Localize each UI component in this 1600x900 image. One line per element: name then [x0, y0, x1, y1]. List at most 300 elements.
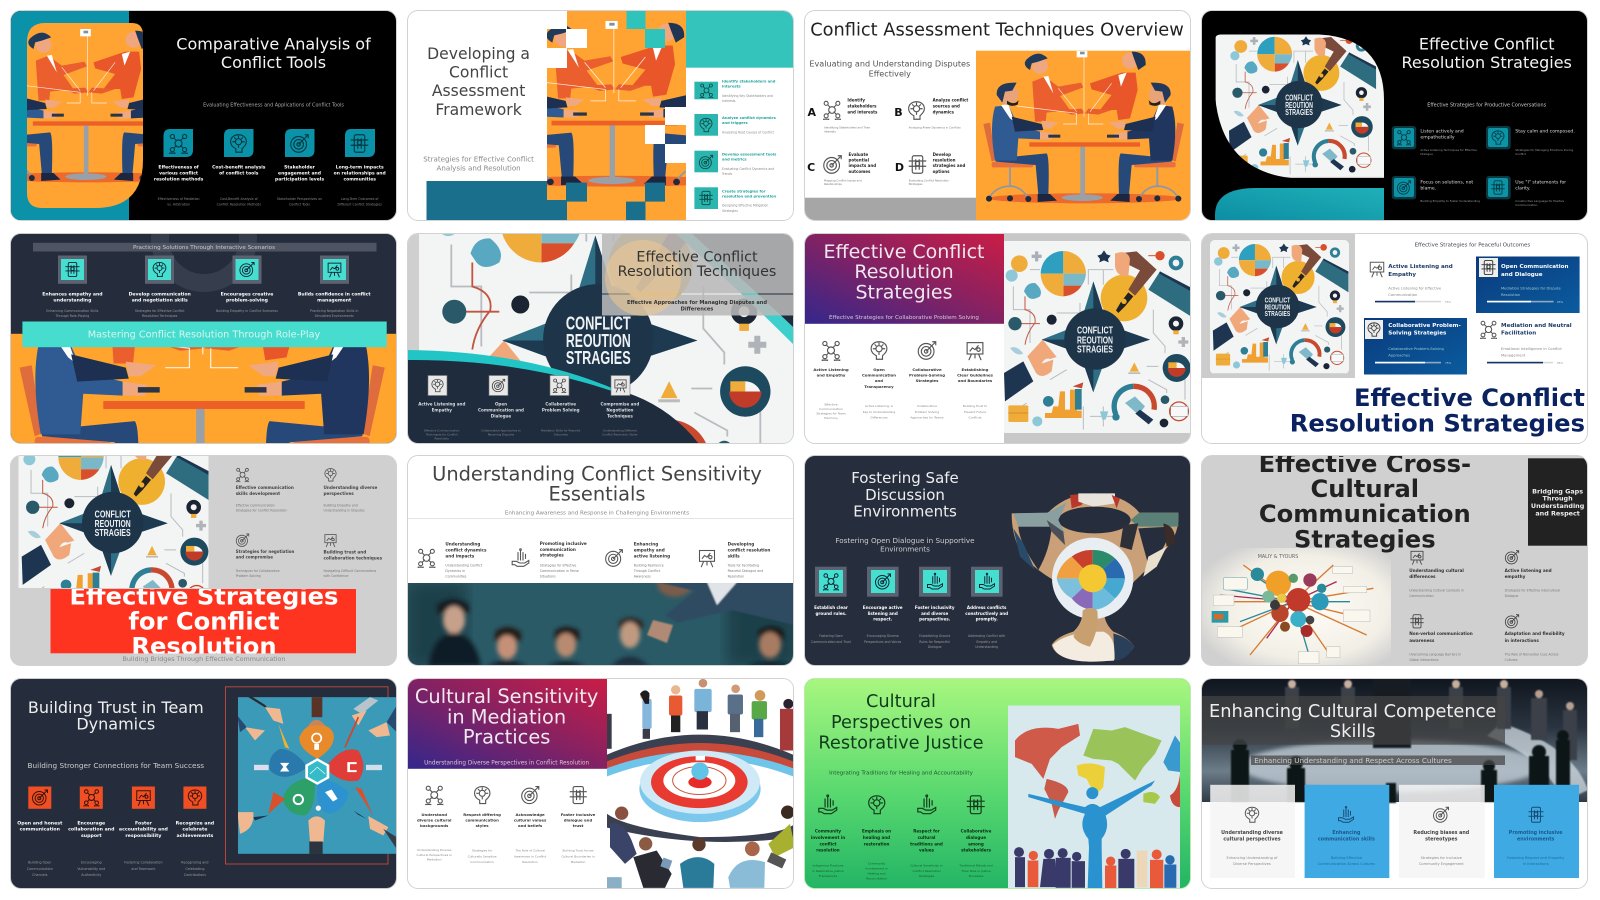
illustration: compass [18, 456, 208, 588]
card 2: communication skills [1318, 836, 1375, 842]
card 3: Reducing biases and [1413, 829, 1470, 835]
subtitle: Building Stronger Connections for Team Success [28, 761, 204, 770]
item 4: Conflicts [969, 415, 982, 419]
title: Essentials [548, 483, 646, 506]
item 3: Enhancing [634, 542, 658, 546]
item 3: empathy and [634, 548, 665, 552]
title [176, 34, 371, 72]
title: Assessment [432, 82, 525, 100]
item 4 [601, 375, 639, 436]
item A: A [807, 106, 816, 119]
item C: C [807, 161, 815, 174]
item 3: cultural [918, 834, 936, 840]
item 2 [463, 786, 501, 864]
item 3: engagement and [278, 171, 321, 177]
item 1: various conflict [159, 171, 199, 177]
illustration: compass [1004, 234, 1190, 443]
illustration: mind map: MALIY & TYOURS [1258, 554, 1298, 560]
illustration: compass leaf: STRAGIES [1285, 108, 1313, 117]
illustration: compass leaf: CONFLICT [1285, 93, 1313, 102]
item 4: Long-Term Outcomes of [341, 197, 379, 201]
item 3 [915, 567, 955, 649]
item 3: Building Empathy to Foster Understanding [1420, 199, 1480, 203]
item 2: listening and [868, 611, 898, 616]
illustration: compass framed [1202, 234, 1355, 378]
item 4: Empathy and [976, 640, 997, 644]
item 4 [700, 542, 770, 578]
card 3: 75% [1445, 360, 1452, 364]
panel: Effective Conflict Resolution Strategies, navy [1201, 232, 1588, 444]
item 2: Community [868, 861, 885, 865]
item 3 [119, 786, 168, 870]
item 4: Building Trust to [963, 404, 987, 408]
card 3: Collaborative Problem-Solving [1388, 346, 1444, 350]
item 4: Understanding [975, 645, 998, 649]
item 4: achievements [177, 832, 213, 838]
item 4: on relationships and [334, 171, 386, 177]
item 1: conflict [820, 841, 837, 846]
photo: pointing figure and blurred crowd [408, 583, 793, 665]
item 3: Problem Solving [542, 407, 580, 412]
panel: Effective Conflict Resolution Strategies, black [1201, 10, 1588, 221]
title: Restorative Justice [818, 732, 984, 753]
item 3: Global Interactions [1409, 658, 1439, 662]
item 2: Encouraging Diverse [867, 634, 899, 638]
item 4: Practicing Negotiation Skills in [310, 308, 358, 312]
item 4: Conflict Resolution Styles [602, 432, 638, 436]
item 4 [965, 567, 1008, 649]
item 3: Collaborative [917, 404, 937, 408]
title block: Effective Conflict [823, 240, 985, 262]
item C: outcomes [848, 169, 871, 174]
item 2: restoration [864, 841, 890, 846]
subtitle: Strategies for Effective Conflict [423, 154, 534, 164]
item 1: understanding [53, 297, 91, 303]
card 4: Facilitation [1501, 330, 1536, 336]
panel: Enhancing Cultural Competence Skills [1201, 678, 1588, 888]
item 2: empathy [1505, 574, 1526, 579]
item 3: Conflict Tools [289, 202, 310, 206]
item 4 [694, 187, 776, 213]
item D: D [895, 161, 904, 174]
item 3: accountability and [119, 826, 168, 832]
item 1: Active Listening Techniques for Effective [1420, 148, 1477, 152]
title block [804, 232, 1004, 323]
item B [894, 98, 968, 130]
item 4: conflict resolution [728, 548, 770, 552]
item 1: Communication [1409, 594, 1434, 598]
item 2: Involvement in [865, 866, 888, 870]
item 4: among [968, 841, 984, 846]
item 3 [910, 794, 943, 878]
item 4: Understanding Different [603, 428, 638, 432]
side callout: and Respect [1535, 510, 1580, 518]
item 2: Open [495, 401, 507, 406]
title panel: Effective Conflict [636, 249, 758, 265]
item C: Relationships [824, 182, 842, 186]
card 4: environments [1517, 836, 1555, 842]
item A: Interests [824, 129, 836, 133]
item 1 [42, 255, 103, 318]
title [28, 697, 204, 733]
illustration: compass: CONFLICT [95, 509, 131, 520]
item A: Identify [847, 98, 865, 102]
illustration: compass large [403, 124, 823, 556]
item 4: Builds confidence in conflict [298, 291, 371, 297]
item 3: Problem Solving [236, 574, 261, 578]
title [1259, 450, 1471, 553]
title: Conflict [449, 64, 508, 82]
illustration: compass framed: CONFLICT [1265, 295, 1291, 304]
card 2: Resolution [1501, 292, 1521, 296]
item 1: Understanding Diverse [417, 848, 452, 852]
card 2: and Dialogue [1501, 272, 1543, 278]
title: Discussion [865, 486, 945, 504]
subtitle [835, 536, 975, 554]
item 2 [1505, 551, 1560, 598]
item 4 [958, 795, 993, 878]
illustration: trophy photo [1012, 493, 1178, 662]
illustration: target stage and circle of people [605, 678, 798, 893]
title block: Practices [463, 725, 550, 748]
card 1: Understanding diverse [1221, 829, 1284, 835]
item 4: Resolution [728, 574, 744, 578]
item 3: awareness [1409, 638, 1435, 643]
item 1: Understanding cultural [1409, 568, 1464, 573]
item 1: conflict dynamics [445, 548, 487, 552]
item 4: Addressing Conflict with [968, 634, 1005, 638]
item 4: Celebrating [185, 866, 204, 870]
item 2: Active Listening: A [865, 404, 894, 408]
card 4: Fostering Respect and Empathy [1507, 856, 1565, 860]
item 1: Active Listening and [418, 401, 465, 406]
card 3: Collaborative Problem- [1388, 322, 1461, 328]
item 3: Stakeholder [284, 164, 316, 170]
illustration: petals and hands [237, 695, 401, 854]
card 1: Active Listening for Effective [1388, 286, 1442, 290]
title band: Enhancing Cultural Competence [1209, 701, 1496, 722]
item 2: Vulnerability and [77, 866, 105, 870]
item A [807, 98, 878, 133]
panel: Cultural Perspectives on Restorative Justice [804, 678, 1191, 888]
item 3 [275, 129, 324, 206]
item 4: Designing Effective Mitigation [722, 204, 768, 208]
item 1: resolution methods [154, 177, 204, 183]
item 3: and diverse [921, 611, 948, 616]
title: Fostering Safe [851, 469, 959, 487]
subtitle: Effectively [869, 68, 911, 78]
item 2 [478, 375, 524, 436]
item 3: Non-verbal communication [1409, 631, 1473, 636]
item 1: Through Role-Playing [54, 314, 89, 318]
illustration: compass framed: REOUTION [1265, 302, 1290, 311]
item D: options [933, 169, 950, 174]
item A: Identifying Stakeholders and Their [824, 126, 871, 130]
card 1: 55% [1445, 300, 1452, 304]
item 4: Techniques [607, 413, 633, 418]
title block: in Mediation [447, 705, 566, 728]
item 2: Dialogue [491, 413, 511, 418]
item 4: Contributions [184, 872, 206, 876]
illustration: compass leaf: REOUTION [1285, 101, 1313, 110]
item 3 [541, 375, 581, 436]
item 3: Awareness in Conflict [514, 854, 547, 858]
subtitle: Evaluating and Understanding Disputes [809, 59, 970, 69]
card 3: stereotypes [1425, 836, 1458, 842]
photo: figures on network floor [1201, 678, 1588, 802]
panel: Cultural Sensitivity in Mediation Practices [407, 678, 794, 888]
item 2: Open [873, 366, 885, 371]
item 2 [68, 786, 114, 876]
dark lower band with teal arcs [407, 232, 794, 444]
item 2: and negotiation skills [132, 297, 188, 303]
item 3: Building Empathy in Conflict Scenarios [216, 308, 278, 312]
item 2: Analyzing Root Causes of Conflict [722, 130, 775, 134]
item 4: The Role of Nonverbal Cues Across [1504, 652, 1559, 656]
item 3 [1409, 615, 1473, 662]
item 2: Develop communication [129, 291, 191, 297]
title: Comparative Analysis of [176, 34, 371, 54]
item 1: Communication [819, 406, 843, 410]
item B: Analyzing Power Dynamics in Conflicts [909, 126, 961, 130]
title box: Resolution [131, 632, 277, 660]
item 1: Open and honest [17, 820, 63, 826]
illustration: compass large: STRAGIES [566, 346, 631, 367]
item 1: in Restorative Justice [812, 868, 844, 872]
teal corner shape [1215, 188, 1384, 221]
item 4 [1504, 615, 1565, 662]
item 2: Encourage [77, 820, 105, 826]
card 4: in Interactions [1523, 862, 1549, 866]
item 3: Strategies [919, 874, 935, 878]
item B: Analyze conflict [933, 98, 968, 102]
illustration: seated men at table [11, 334, 396, 443]
card 1: Diverse Perspectives [1233, 862, 1271, 866]
item 1: Empathy [432, 407, 452, 412]
illustration: meeting [976, 50, 1191, 221]
item 2: communication [540, 547, 576, 552]
subtitle: Effective Strategies for Productive Conversations [1427, 102, 1547, 108]
item 3 [1392, 176, 1480, 203]
item 3: Trends [721, 172, 732, 176]
item 2: Culturally Sensitive [468, 854, 497, 858]
item 2 [862, 795, 891, 880]
item 1: Identifying Key Stakeholders and [722, 94, 773, 98]
panel: Developing a Conflict Assessment Framework [407, 10, 794, 221]
item 2: Encourage active [863, 605, 903, 610]
item 2: Emphasis on [862, 828, 891, 833]
item 4: Negotiation [606, 407, 634, 412]
card 3 [1364, 318, 1467, 374]
item 1: Communication and Trust [811, 640, 852, 644]
item 3 [909, 341, 945, 419]
panel: Conflict Assessment Techniques Overview [804, 10, 1191, 221]
item 1: Interests [722, 99, 736, 103]
item 3: and metrics [722, 158, 747, 162]
title: Resolution Strategies [1290, 409, 1585, 437]
item 4: Mediation [571, 860, 585, 864]
item 3: Cultural Sensitivity in [910, 863, 943, 867]
item 2: strategies [540, 552, 564, 558]
title: Understanding Conflict Sensitivity [432, 462, 762, 485]
item 4: stakeholders [961, 847, 991, 852]
item 4: collaboration techniques [324, 556, 383, 560]
item 1: Fostering Open [819, 634, 843, 638]
item 4: Cultures [1505, 658, 1518, 662]
item 4: Use "I" statements for [1515, 180, 1566, 186]
item 3 [235, 534, 295, 578]
side callout: Through [1543, 495, 1573, 503]
side callout: Understanding [1531, 502, 1585, 510]
title: Conflict Assessment Techniques Overview [810, 20, 1184, 41]
panel: Mastering Conflict Resolution Through Role-Play [10, 232, 397, 444]
title: Conflict Tools [221, 53, 326, 72]
item 1: Effectiveness of Mediation [158, 197, 200, 201]
item 4: Recognize and [176, 820, 214, 826]
illustration: compass large: REOUTION [566, 330, 631, 351]
item 2: Resolution Techniques [142, 314, 178, 318]
item 1: vs. Arbitration [167, 202, 190, 206]
item 4: Establishing [962, 366, 989, 371]
card 2: Open Communication [1501, 264, 1568, 270]
item 1: Dynamics in [445, 569, 465, 573]
item 2: Understanding in Disputes [324, 508, 365, 512]
title: Effective Conflict [1354, 384, 1585, 412]
item 4: Compromise and [601, 401, 639, 406]
card 1: cultural perspectives [1223, 836, 1281, 842]
item 1 [418, 542, 487, 578]
item 1: Strategies for Conflict Resolution [236, 508, 287, 512]
item 4: dialogue and [564, 817, 592, 822]
item 3: Resolution [522, 860, 538, 864]
item 4: Cultural Boundaries in [561, 854, 595, 858]
item 4 [324, 535, 383, 578]
item 2: Key to Understanding [863, 410, 895, 414]
panel: Understanding Conflict Sensitivity Essentials [407, 455, 794, 666]
item 3: cultural values [514, 817, 547, 822]
title: Resolution Strategies [1401, 53, 1572, 72]
subtitle: Analysis and Resolution [437, 163, 521, 172]
item 2: Communication [470, 860, 494, 864]
item 1: Community [815, 828, 841, 833]
illustration: compass: REOUTION [1077, 335, 1113, 346]
item 2: Cost-Benefit Analysis of [220, 197, 259, 201]
side callout [1528, 458, 1588, 546]
item 2: Conflict Resolution Methods [217, 202, 261, 206]
title block: Cultural Sensitivity [415, 685, 598, 708]
item 3: Focus on solutions, not [1420, 180, 1473, 186]
card 1 [1210, 784, 1295, 878]
title box: Effective Strategies [70, 583, 338, 611]
title band [1201, 696, 1505, 744]
title: Cultural [1311, 475, 1419, 503]
item 2: Building Empathy and [324, 504, 358, 508]
item 4: Clear Guidelines [957, 372, 994, 377]
panel: Effective Conflict Resolution Techniques [407, 232, 794, 444]
subtitle band: Enhancing Understanding and Respect Across Cultures [1254, 756, 1452, 764]
item 1: interests [722, 85, 741, 89]
item 4: Tools for Facilitating [727, 563, 759, 567]
item C [807, 152, 876, 186]
item 3: Mediation Skills for Peaceful [541, 428, 581, 432]
item 3: Respect for [913, 828, 940, 833]
item 1: Enhancing Communication Skills [46, 308, 99, 312]
item 4: trust [573, 823, 583, 828]
item 1 [811, 794, 845, 878]
item 2: Perspectives and Voices [864, 640, 902, 644]
item 1: Techniques for Conflict [425, 432, 459, 436]
card 4: Management [1501, 353, 1526, 357]
item 1: Communication [27, 866, 53, 870]
item 3: Overcoming Language Barriers in [1409, 652, 1461, 656]
item 3: Evaluating Conflict Dynamics and [722, 167, 774, 171]
item 2: styles [476, 823, 489, 828]
title [1290, 384, 1585, 437]
item 3: Foster [135, 820, 152, 826]
item 2 [863, 567, 903, 644]
item 1: ground rules. [815, 611, 847, 616]
item 4: in interactions [1505, 638, 1539, 643]
item 2 [212, 129, 266, 206]
item 4: Building trust and [324, 550, 366, 554]
item 1: backgrounds [420, 823, 449, 828]
item 2: Strategies for Effective Intercultural [1505, 588, 1560, 592]
item 4: Different Conflict Strategies [338, 202, 382, 206]
item 1: differences [1409, 574, 1436, 579]
item 4 [957, 342, 994, 419]
item 4: constructively and [965, 611, 1008, 616]
title [851, 469, 959, 521]
title: Environments [853, 503, 957, 521]
item 4: Their Role in Justice [960, 868, 991, 872]
subtitle: Integrating Traditions for Healing and Accountability [829, 770, 974, 776]
item 2: support [81, 832, 102, 838]
item 3: problem-solving [226, 297, 268, 303]
item 2: communication [465, 817, 499, 822]
title box: for Conflict [128, 607, 280, 635]
item B: sources and [933, 104, 960, 108]
title [432, 462, 762, 506]
title panel: Differences [681, 306, 713, 312]
item 2: collaboration and [68, 826, 114, 832]
item 1: Active Listening [813, 366, 849, 371]
item 4: Navigating Difficult Conversations [324, 569, 377, 573]
item 1: Harmony [824, 416, 838, 420]
item 3: Stakeholder Perspectives on [277, 197, 322, 201]
title [1401, 34, 1572, 72]
item 3: responsibility [125, 832, 161, 838]
card 3 [1399, 784, 1485, 878]
item 3 [694, 151, 777, 176]
item 3 [216, 255, 278, 312]
item 3: and Teamwork [131, 866, 155, 870]
item 4: Processes [969, 874, 984, 878]
item 1: Identify stakeholders and [722, 80, 776, 84]
item C: Mapping Conflict Issues and [824, 179, 862, 183]
item 3: Through Conflict [633, 569, 661, 573]
item 3: participation levels [275, 177, 324, 183]
item 4 [176, 786, 214, 876]
item 1 [154, 129, 204, 206]
subtitle: Effective Strategies for Peaceful Outcomes [1415, 242, 1530, 248]
item 2: Conflict [1515, 152, 1527, 156]
item 4: Prevent Future [964, 410, 986, 414]
card 4: Mediation and Neutral [1501, 322, 1572, 328]
item C: impacts and [848, 163, 876, 168]
item 2 [324, 469, 378, 512]
illustration: compass: REOUTION [95, 519, 131, 530]
item D [895, 152, 965, 186]
